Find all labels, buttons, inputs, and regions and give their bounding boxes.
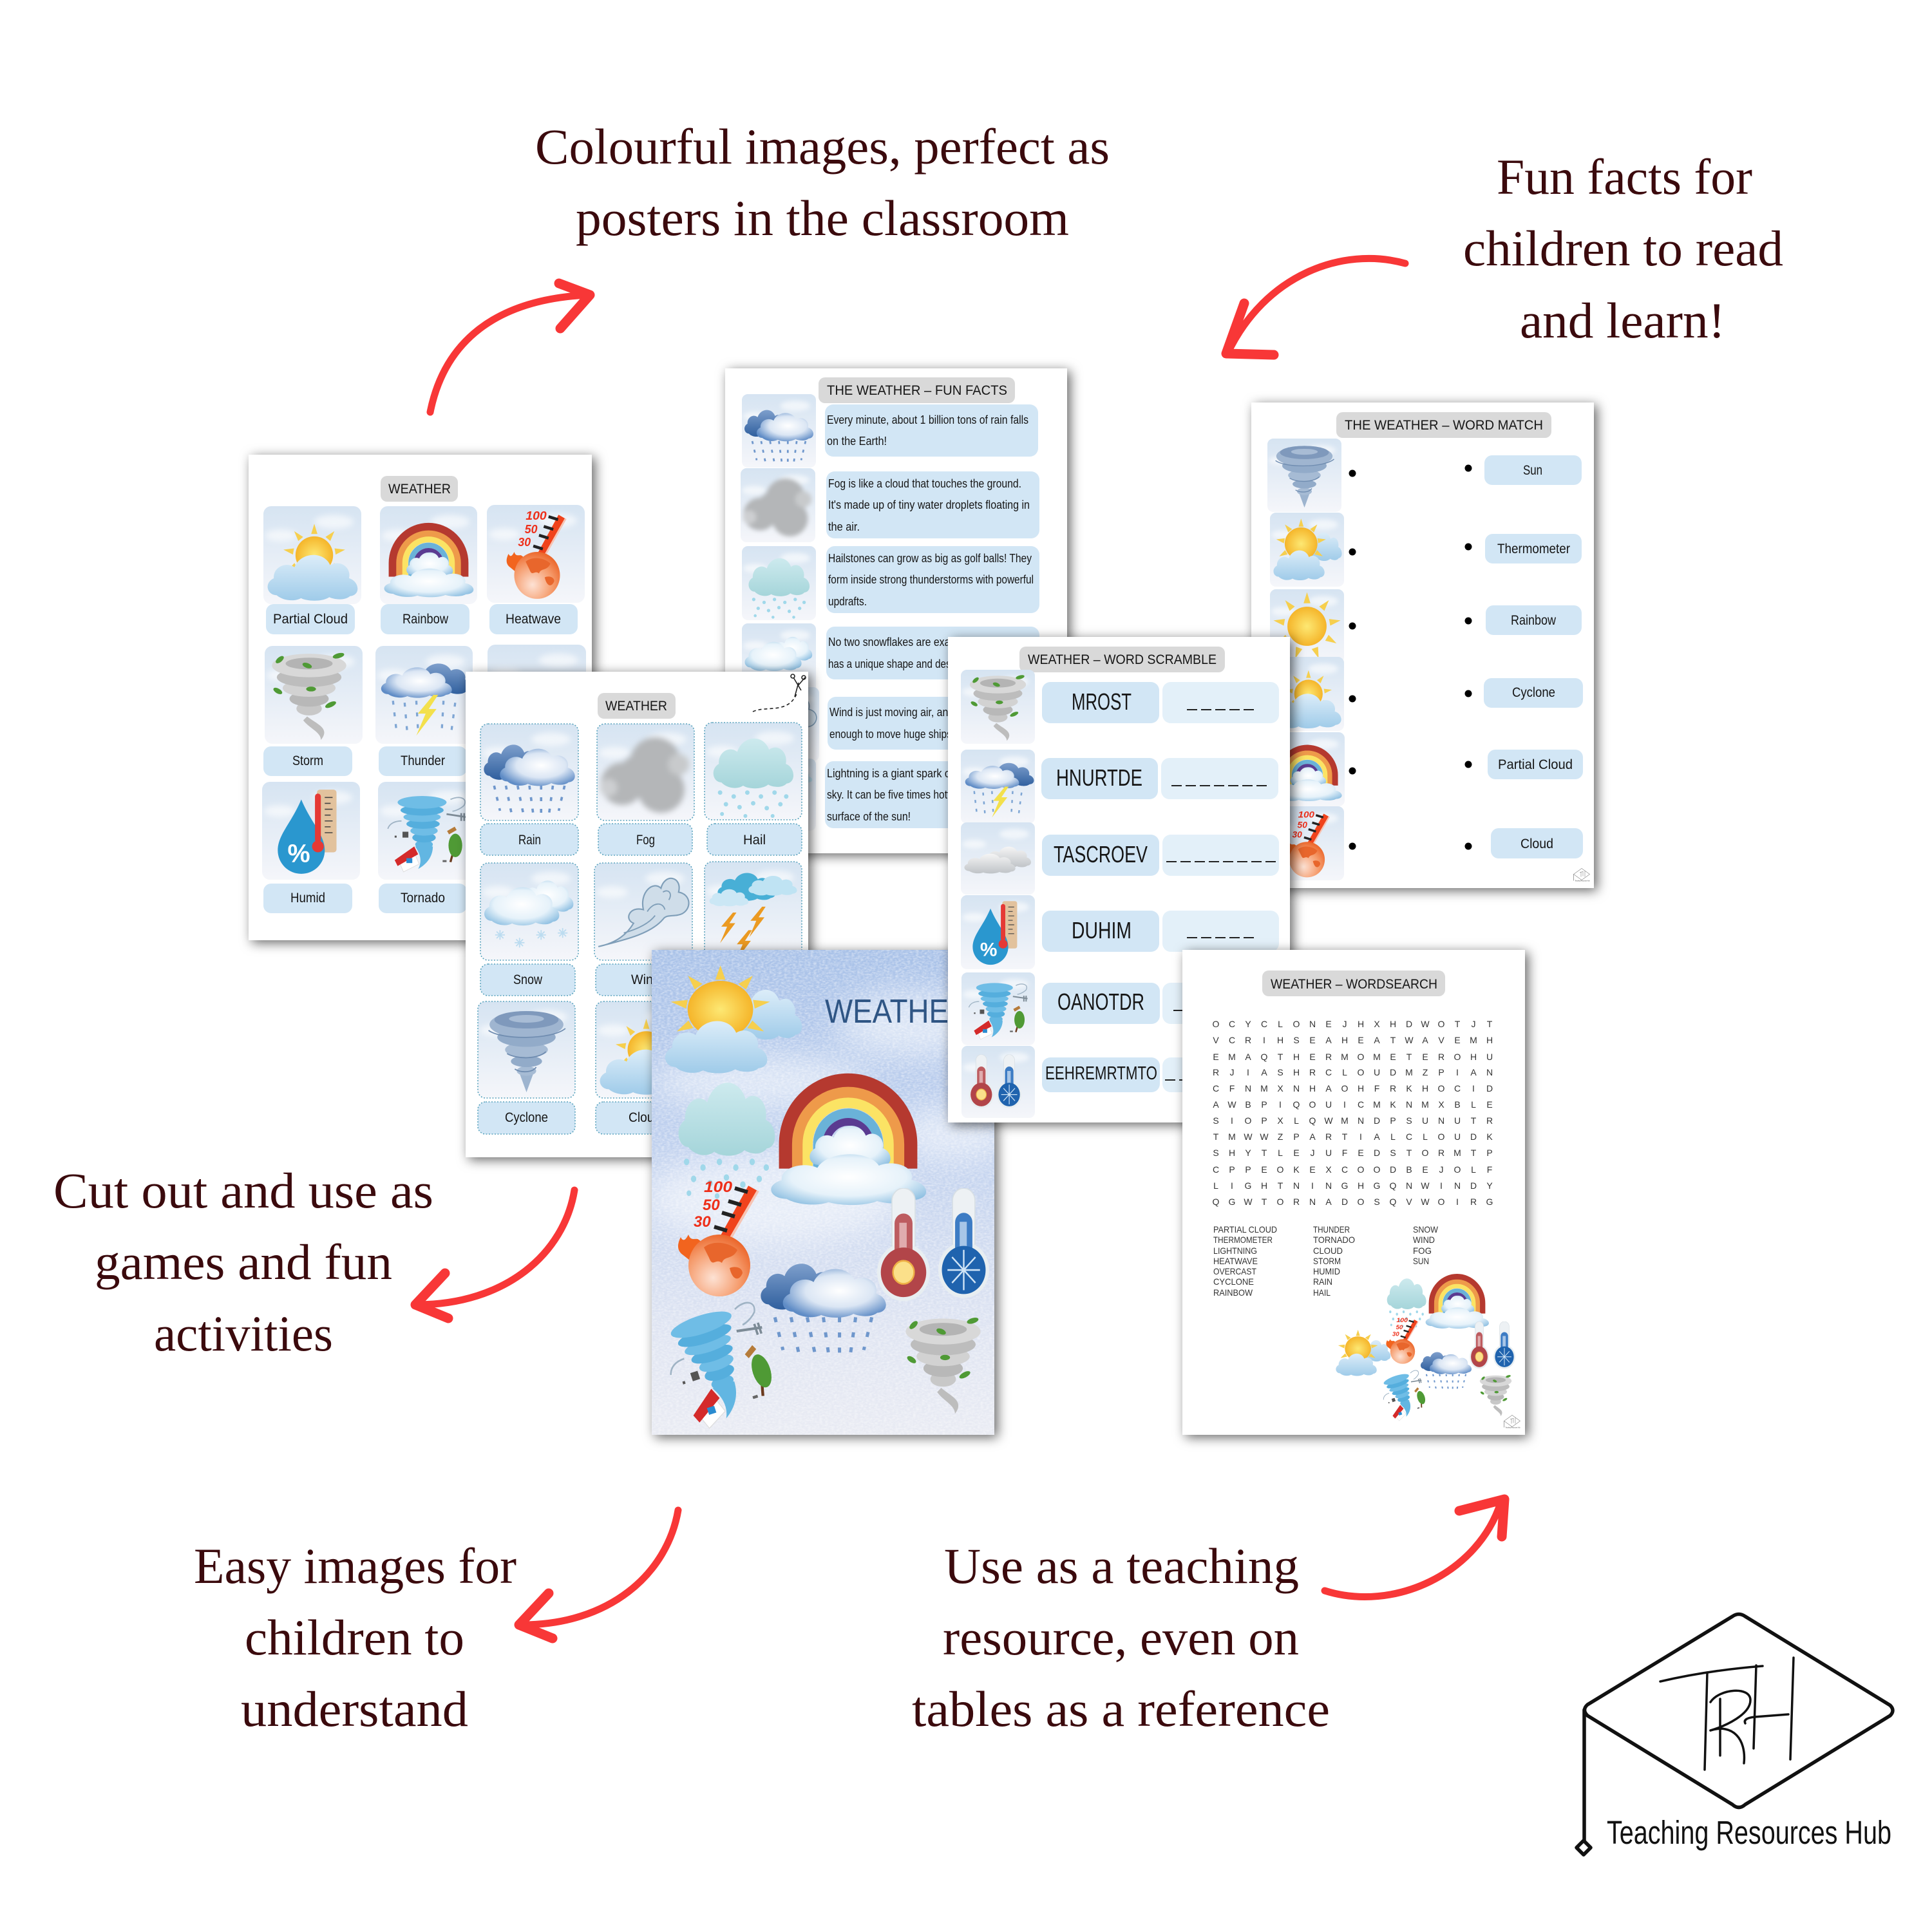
wordsearch letter grid: CPPEOKEXCOODBEJOLF bbox=[1213, 1164, 1492, 1175]
icon: scissors with dashed cut line bbox=[753, 674, 806, 712]
label: Rain bbox=[480, 824, 578, 855]
scramble: OANOTDR bbox=[1042, 983, 1279, 1024]
panel: weather flashcards sheet bbox=[249, 455, 592, 940]
label: Tornado bbox=[379, 884, 467, 913]
tile: rainbow bbox=[380, 506, 477, 604]
word list column 1 bbox=[1213, 1224, 1277, 1298]
heading: fun facts: children to read bbox=[1463, 220, 1783, 276]
art: hail cloud bbox=[679, 1083, 775, 1199]
wordsearch letter grid: TMWWZPARTIALCLOUDK bbox=[1213, 1132, 1493, 1142]
word: Sun: Sun bbox=[1523, 463, 1542, 478]
heading: easy images: Easy images for bbox=[194, 1538, 516, 1594]
fact: hail bbox=[826, 546, 1039, 613]
wordsearch letter grid: RJIASHRCLOUDMZPIAN bbox=[1213, 1067, 1493, 1077]
art: tornado bbox=[656, 1298, 787, 1435]
wordsearch letter grid: CFNMXNHAOHFRKHOCID bbox=[1213, 1083, 1493, 1094]
word: Thermometer bbox=[1485, 534, 1582, 564]
heading: easy images: children to bbox=[245, 1609, 464, 1665]
label: Snow bbox=[480, 964, 575, 996]
card: cyclone bbox=[478, 1001, 575, 1098]
tile: partial cloud bbox=[263, 506, 361, 604]
tile: wind bbox=[745, 687, 819, 761]
icon: mini logo bbox=[1504, 1416, 1520, 1428]
word list column 2: RAIN bbox=[1313, 1276, 1332, 1287]
label: Heatwave: Heatwave bbox=[506, 612, 561, 627]
tile: sun and clouds bbox=[1270, 513, 1344, 587]
label: Hail: Hail bbox=[743, 833, 766, 848]
tile: tornado bbox=[378, 782, 476, 880]
word: Partial Cloud: Partial Cloud bbox=[1498, 757, 1573, 772]
logo: Teaching Resources Hub bbox=[1577, 1614, 1893, 1855]
wordsearch letter grid: EMAQTHERMOMETEROHU bbox=[1213, 1052, 1493, 1062]
heading: teaching resource: tables as a reference bbox=[912, 1681, 1330, 1737]
fact: hail: Hailstones can grow as big as golf balls! They bbox=[828, 552, 1032, 565]
word list column 1: LIGHTNING bbox=[1213, 1245, 1257, 1256]
heading: word match bbox=[1336, 412, 1551, 438]
label: Rainbow bbox=[381, 604, 469, 634]
word list column 1: CYCLONE bbox=[1213, 1276, 1254, 1287]
arrow: to colourful images bbox=[430, 283, 590, 412]
scramble: HNURTDE bbox=[1041, 758, 1278, 799]
tile: storm bbox=[961, 670, 1035, 744]
label: Hail bbox=[707, 824, 802, 855]
word list column 2: CLOUD bbox=[1313, 1245, 1343, 1256]
word: Rainbow: Rainbow bbox=[1511, 613, 1557, 628]
heading: fun facts bbox=[1463, 149, 1783, 348]
scramble: EEHREMRTMTO bbox=[1042, 1057, 1279, 1092]
fact: rain: Every minute, about 1 billion tons of rain falls bbox=[827, 413, 1028, 426]
word list column 1: RAINBOW bbox=[1213, 1287, 1253, 1298]
word list column 2: HAIL bbox=[1313, 1287, 1331, 1298]
label: Snow: Snow bbox=[513, 972, 543, 987]
card: snow bbox=[480, 863, 578, 960]
fact: lightning: sky. It can be five times hotter than the bbox=[827, 788, 998, 801]
art: sun and clouds bbox=[665, 965, 802, 1074]
wordsearch letter grid: SHYTLEJUFEDSTORMTP bbox=[1213, 1148, 1493, 1158]
heading: word scramble bbox=[1019, 647, 1225, 672]
panel: wordsearch sheet bbox=[1182, 950, 1525, 1435]
arrow: to cut out text bbox=[415, 1190, 574, 1318]
heading: cut out: games and fun bbox=[95, 1234, 392, 1290]
label: Heatwave bbox=[489, 604, 578, 634]
heading: colourful images: Colourful images, perfect as bbox=[535, 118, 1110, 175]
heading: cut out bbox=[53, 1162, 433, 1361]
tile: heatwave bbox=[487, 505, 585, 603]
word list column 3: FOG bbox=[1413, 1245, 1432, 1256]
panel: word scramble sheet bbox=[948, 637, 1290, 1122]
panel: weather poster bbox=[644, 950, 1011, 1435]
tile: thunder bbox=[375, 646, 473, 744]
tile: hail bbox=[742, 546, 816, 620]
tile: fog bbox=[741, 468, 815, 542]
heading: colourful images: posters in the classroom bbox=[576, 190, 1069, 246]
word list column 1: HEATWAVE bbox=[1213, 1256, 1258, 1266]
label: Rain: Rain bbox=[518, 833, 541, 848]
fact: snow: No two snowflakes are exactly alike! Each one bbox=[828, 636, 1038, 649]
card: hail bbox=[705, 723, 802, 820]
heading: word scramble: WEATHER – WORD SCRAMBLE bbox=[1028, 652, 1217, 667]
heading: colourful images bbox=[535, 118, 1110, 246]
fact: wind bbox=[828, 697, 1041, 750]
art: rainbow bbox=[771, 1080, 926, 1205]
word list column 2: STORM bbox=[1313, 1256, 1341, 1266]
label: Cyclone bbox=[478, 1102, 575, 1134]
fact: fog: It's made up of tiny water droplets floating in bbox=[828, 498, 1030, 511]
tile: partial cloud bbox=[1270, 657, 1344, 731]
wordsearch letter grid: VCRIHSEAHEATWAVEMH bbox=[1213, 1035, 1493, 1045]
tile: humid bbox=[262, 782, 360, 880]
fact: rain bbox=[825, 404, 1038, 457]
heading: cut out: activities bbox=[154, 1305, 333, 1361]
tile: snow bbox=[742, 623, 816, 697]
art: storm bbox=[905, 1316, 981, 1414]
icon: mini logo bbox=[1574, 868, 1590, 882]
label: Cloud bbox=[596, 1102, 693, 1134]
word: Rainbow bbox=[1486, 605, 1582, 635]
tile: storm bbox=[265, 646, 363, 744]
fact: fog: Fog is like a cloud that touches the ground. bbox=[828, 477, 1021, 490]
wordsearch letter grid: OCYCLONEJHXHDWOTJT bbox=[1213, 1019, 1493, 1029]
fact: hail: updrafts. bbox=[828, 595, 867, 608]
heading: easy images bbox=[194, 1538, 516, 1737]
heading: cut out: Cut out and use as bbox=[53, 1162, 433, 1218]
word list column 2: TORNADO bbox=[1313, 1235, 1355, 1245]
word list column 3: SNOW bbox=[1413, 1224, 1439, 1235]
word: Thermometer: Thermometer bbox=[1497, 542, 1570, 556]
label: Cyclone: Cyclone bbox=[505, 1110, 548, 1125]
tile: rainbow bbox=[1270, 732, 1345, 806]
label: Fog: Fog bbox=[636, 833, 655, 848]
label: Partial Cloud: Partial Cloud bbox=[273, 612, 348, 627]
wordsearch letter grid: SIOPXLQWMNDPSUNUTR bbox=[1213, 1115, 1493, 1126]
tile: heatwave bbox=[1270, 806, 1344, 880]
scramble: EEHREMRTMTO: EEHREMRTMTO bbox=[1045, 1063, 1157, 1084]
label: Humid: Humid bbox=[290, 891, 325, 905]
word list column 3: SUN bbox=[1413, 1256, 1429, 1266]
art: cold thermometer bbox=[938, 1188, 989, 1298]
word list column 2 bbox=[1313, 1224, 1355, 1298]
fact: lightning bbox=[825, 761, 1039, 828]
label: Wind: Wind bbox=[631, 972, 660, 987]
scramble: TASCROEV bbox=[1042, 835, 1279, 876]
scramble: MROST bbox=[1042, 682, 1279, 723]
wordsearch letter grid: LIGHTNINGHGQNWINDY bbox=[1213, 1180, 1493, 1191]
tile: overcast bbox=[961, 822, 1035, 895]
fact: snow: has a unique shape and design. bbox=[828, 658, 967, 670]
label: Humid bbox=[263, 884, 352, 913]
heading: teaching resource bbox=[912, 1538, 1330, 1737]
label: Cloud: Cloud bbox=[629, 1110, 661, 1125]
word list column 1: OVERCAST bbox=[1213, 1266, 1256, 1276]
heading: WEATHER bbox=[598, 693, 676, 719]
card: lightning bbox=[705, 862, 802, 961]
tile: humid bbox=[961, 895, 1035, 969]
art: hot thermometer bbox=[877, 1188, 930, 1301]
word list column 1: PARTIAL CLOUD bbox=[1213, 1224, 1277, 1235]
fact: fog bbox=[826, 471, 1039, 538]
card: cloud bbox=[596, 1001, 693, 1098]
arrow: to wordsearch sheet bbox=[1325, 1499, 1504, 1597]
fact: hail: form inside strong thunderstorms with powerful bbox=[828, 573, 1034, 586]
arrow: to fun facts sheet bbox=[1226, 258, 1405, 355]
tile: cyclone bbox=[1267, 439, 1341, 512]
tile: tornado bbox=[961, 972, 1035, 1045]
poster cloud wash bbox=[644, 950, 1011, 1435]
word: Cyclone bbox=[1484, 678, 1583, 708]
fact: rain: on the Earth! bbox=[827, 435, 887, 448]
arrow: to easy images text bbox=[519, 1510, 678, 1638]
word list column 3: WIND bbox=[1413, 1235, 1435, 1245]
scramble: DUHIM bbox=[1042, 911, 1279, 952]
matching dots bbox=[1349, 465, 1472, 850]
card: fog bbox=[597, 724, 694, 820]
heading: fun facts: Fun facts for bbox=[1497, 149, 1752, 205]
heading: easy images: understand bbox=[241, 1681, 468, 1737]
scramble: MROST: MROST bbox=[1072, 688, 1132, 715]
word: Sun bbox=[1484, 455, 1582, 485]
wordsearch letter grid bbox=[1213, 1019, 1493, 1207]
label: Thunder bbox=[379, 746, 467, 776]
word list column 2: THUNDER bbox=[1313, 1224, 1350, 1235]
tile: overcast bbox=[488, 645, 586, 743]
word list column 3 bbox=[1413, 1224, 1439, 1266]
card: rain bbox=[480, 724, 578, 820]
wordsearch illustrations bbox=[1336, 1277, 1515, 1423]
heading: WEATHER: WEATHER bbox=[388, 482, 451, 497]
label: Thunder: Thunder bbox=[401, 753, 445, 768]
label: Storm bbox=[263, 746, 352, 776]
heading: WEATHER: WEATHER bbox=[605, 699, 667, 714]
panel: word match sheet bbox=[1251, 402, 1594, 888]
scramble: OANOTDR: OANOTDR bbox=[1057, 989, 1144, 1015]
label: Tornado: Tornado bbox=[401, 891, 445, 905]
heading: fun facts bbox=[819, 377, 1015, 403]
label: Fog bbox=[598, 824, 692, 855]
fact: fog: the air. bbox=[828, 520, 860, 533]
scramble: DUHIM: DUHIM bbox=[1072, 917, 1132, 943]
fact: wind: enough to move huge ships across the ocean! bbox=[829, 728, 1033, 741]
art: rain cloud bbox=[761, 1264, 886, 1355]
tile: lightning bbox=[742, 759, 816, 831]
label: Partial Cloud bbox=[266, 604, 355, 634]
heading: wordsearch bbox=[1262, 971, 1445, 996]
tile: rain bbox=[742, 394, 816, 468]
label: Storm: Storm bbox=[292, 753, 323, 768]
heading: fun facts: and learn! bbox=[1520, 292, 1725, 348]
tile: thunder bbox=[961, 750, 1035, 824]
tile: thermometers bbox=[961, 1046, 1035, 1118]
art: heatwave globe bbox=[678, 1179, 758, 1296]
tile: sun bbox=[1270, 589, 1344, 663]
heading: word match: THE WEATHER – WORD MATCH bbox=[1345, 418, 1543, 433]
heading: WEATHER bbox=[381, 476, 458, 502]
panel: cut-out cards sheet bbox=[466, 672, 808, 1157]
fact: lightning: surface of the sun! bbox=[827, 810, 911, 823]
wordsearch letter grid: QGWTORNADOSQVWOIRG bbox=[1213, 1197, 1493, 1207]
word list column 1: THERMOMETER bbox=[1213, 1235, 1273, 1245]
label: Rainbow: Rainbow bbox=[402, 612, 449, 627]
scramble: HNURTDE: HNURTDE bbox=[1056, 764, 1142, 791]
logo: cap outline bbox=[1577, 1614, 1893, 1855]
heading: fun facts: THE WEATHER – FUN FACTS bbox=[827, 383, 1007, 398]
word: Partial Cloud bbox=[1488, 750, 1583, 779]
word: Cloud: Cloud bbox=[1520, 837, 1553, 851]
word: Cloud bbox=[1491, 828, 1583, 858]
label: Wind bbox=[596, 964, 692, 996]
heading: teaching resource: Use as a teaching bbox=[944, 1538, 1299, 1594]
card: wind bbox=[594, 863, 692, 960]
panel: fun facts sheet bbox=[725, 368, 1067, 853]
word list column 2: HUMID bbox=[1313, 1266, 1340, 1276]
heading: teaching resource: resource, even on bbox=[943, 1609, 1299, 1665]
fact: wind: Wind is just moving air, and it can be strong bbox=[829, 706, 1027, 719]
scramble: TASCROEV: TASCROEV bbox=[1054, 841, 1148, 867]
fact: lightning: Lightning is a giant spark of electricity in the bbox=[827, 767, 1028, 780]
fact: snow bbox=[826, 627, 1039, 679]
logo: TRH monogram bbox=[1660, 1658, 1794, 1770]
poster title: WEATHER bbox=[825, 993, 970, 1030]
wordsearch letter grid: AWBPIQOUICMKNMXBLE bbox=[1213, 1099, 1493, 1110]
word: Cyclone: Cyclone bbox=[1512, 685, 1555, 700]
heading: wordsearch: WEATHER – WORDSEARCH bbox=[1271, 977, 1437, 992]
